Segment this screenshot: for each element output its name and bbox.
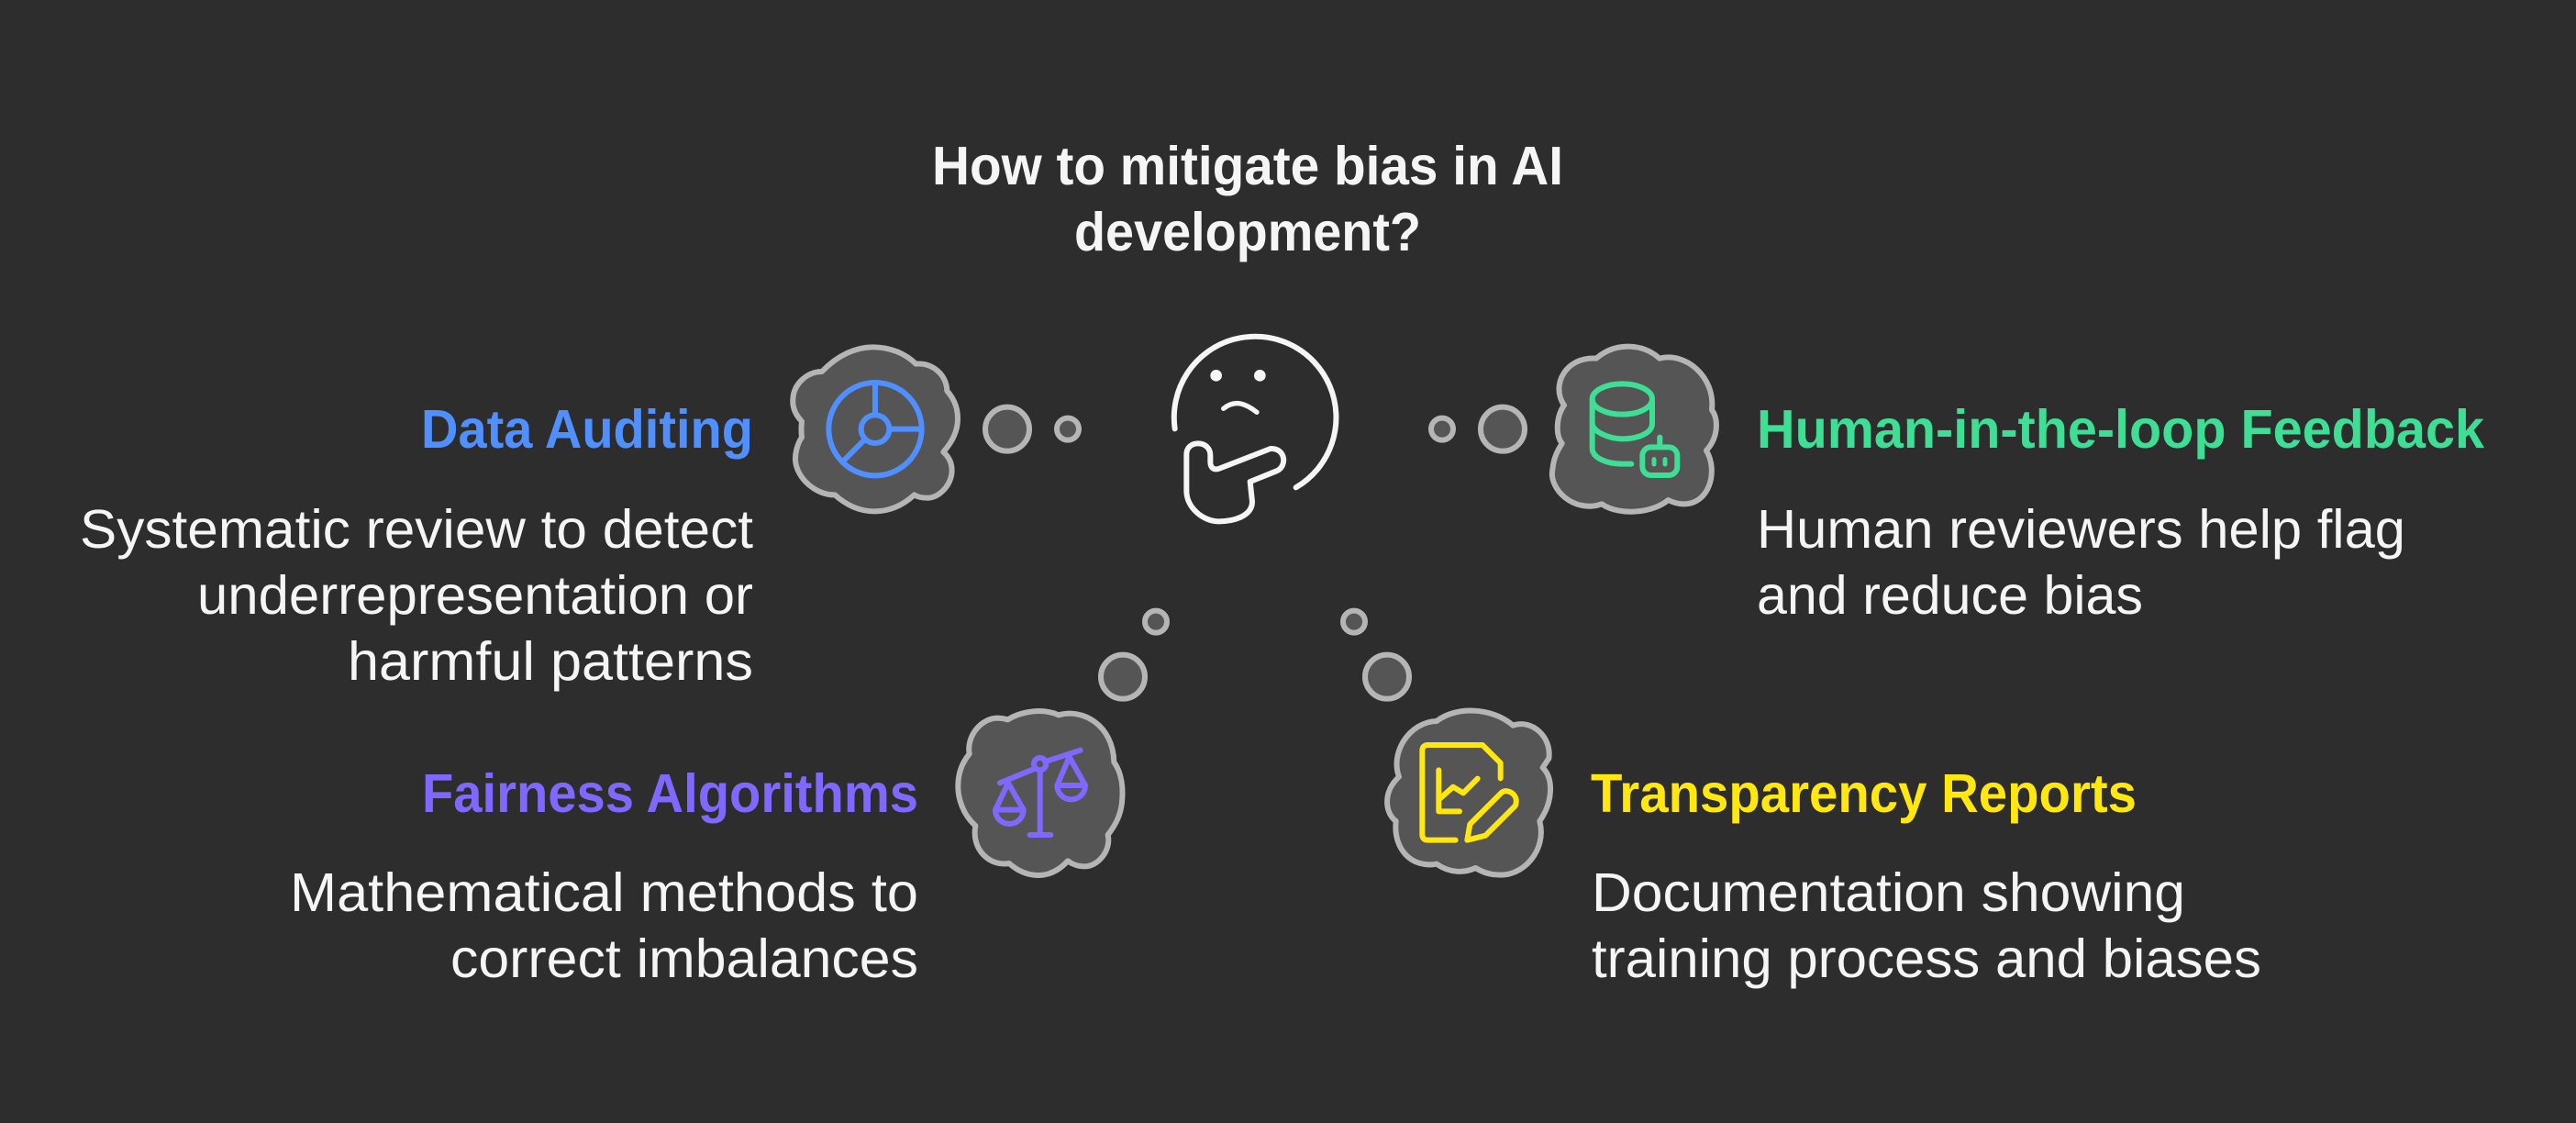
text: transparency description: Documentation showing [1592, 862, 2185, 923]
title [932, 136, 1563, 262]
text: data auditing description: Systematic review to detect [80, 499, 753, 560]
text: fairness description [290, 862, 918, 989]
text: transparency description [1592, 862, 2261, 989]
text: data auditing description: harmful patterns [348, 631, 753, 692]
heading: transparency reports: Transparency Reports [1591, 763, 2137, 824]
thought bubbles right [1431, 407, 1525, 451]
heading: data auditing: Data Auditing [421, 399, 753, 460]
text: data auditing description [80, 499, 753, 692]
text: human-in-the-loop description [1757, 499, 2405, 626]
heading: human-in-the-loop feedback: Human-in-the-loop Feedback [1757, 399, 2484, 460]
text: fairness description: correct imbalances [450, 928, 918, 989]
thought cloud with report icon [1343, 611, 1550, 875]
panel: data auditing [80, 347, 1079, 692]
thought cloud with scales icon [958, 611, 1167, 875]
panel: human-in-the-loop feedback [1431, 347, 2484, 626]
heading: fairness algorithms: Fairness Algorithms [422, 763, 918, 824]
text: human-in-the-loop description: Human reviewers help flag [1757, 499, 2405, 560]
text: data auditing description: underrepresentation or [197, 565, 753, 626]
title: development? [1074, 202, 1421, 262]
panel: fairness algorithms [290, 611, 1167, 989]
text: transparency description: training process and biases [1592, 928, 2261, 989]
icon: thinking face [1174, 337, 1336, 521]
thought cloud with chart icon [793, 347, 1079, 511]
panel: transparency reports [1343, 611, 2261, 989]
title: How to mitigate bias in AI [932, 136, 1563, 196]
thought cloud with database robot icon [1552, 347, 1716, 512]
text: human-in-the-loop description: and reduce bias [1757, 565, 2143, 626]
text: fairness description: Mathematical methods to [290, 862, 918, 923]
